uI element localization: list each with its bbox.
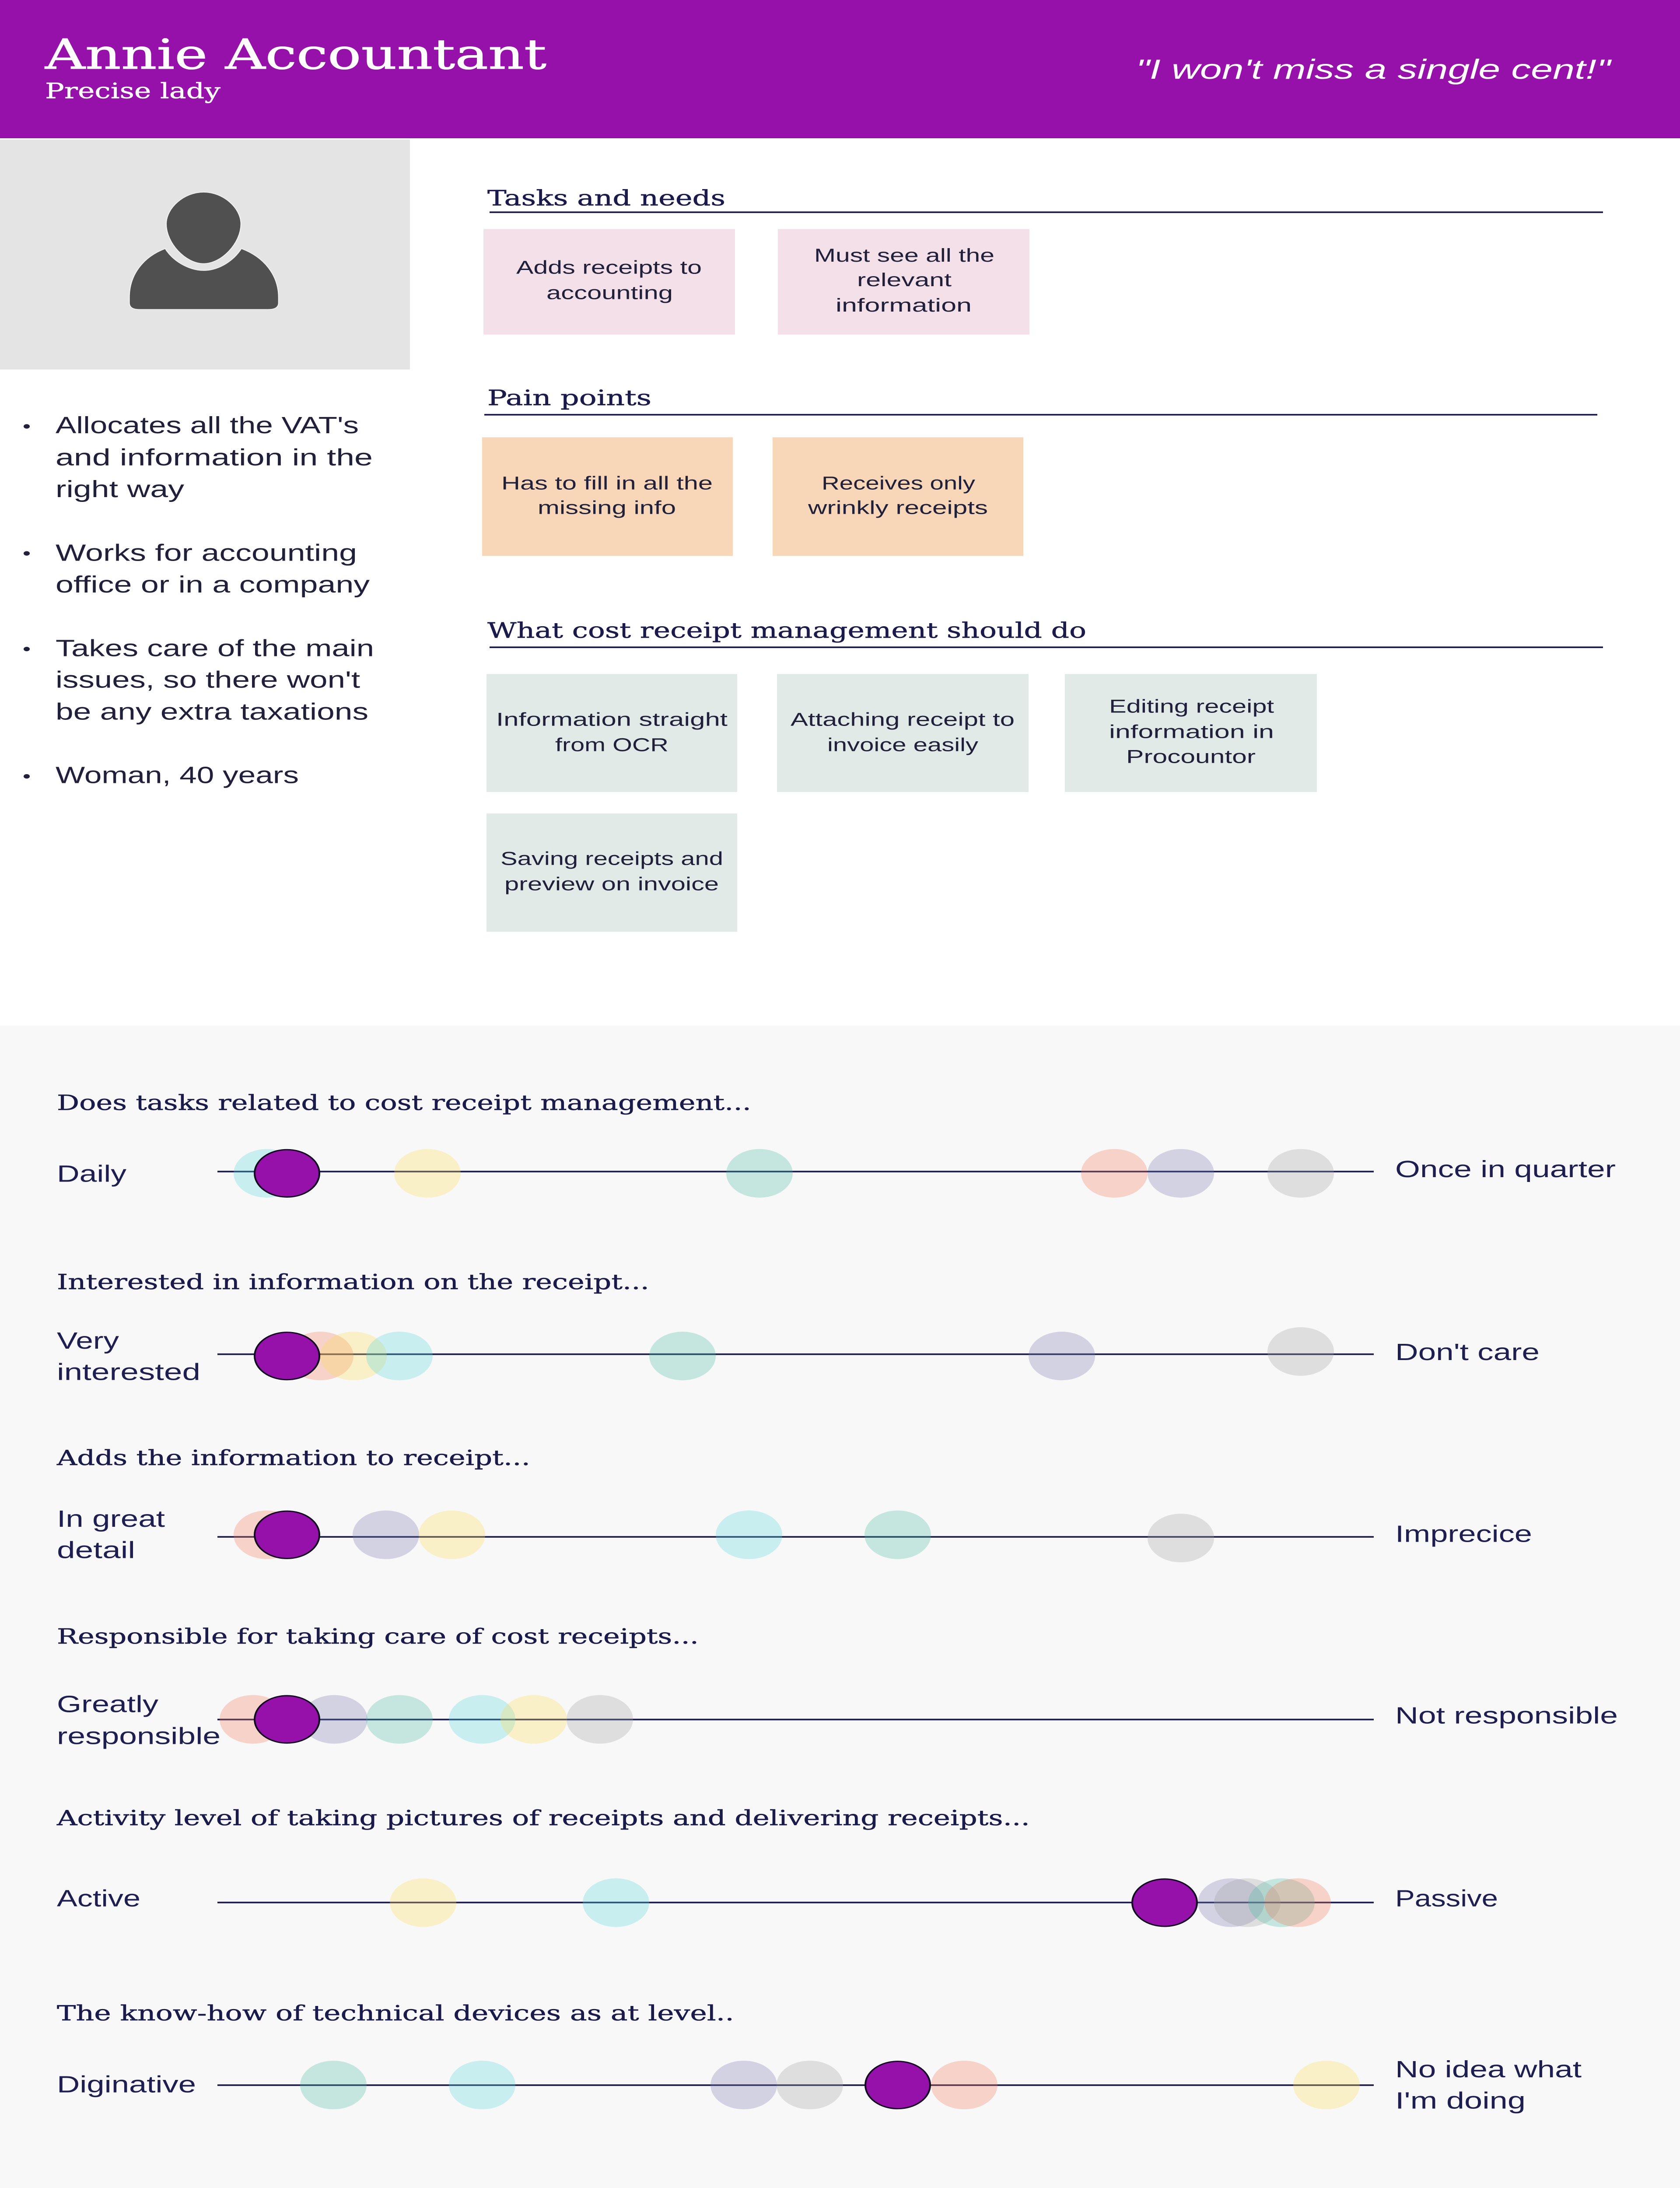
heading: what it should do [487, 618, 1603, 648]
left label: Active [57, 1885, 140, 1911]
card: information from OCR: Information straight [496, 709, 728, 730]
persona marker [255, 1332, 319, 1380]
right label: No idea what [1395, 2056, 1582, 2083]
bullet 2: Works for accounting [56, 539, 357, 566]
title: Annie Accountant [45, 30, 546, 79]
bullet 1: and information in the [56, 444, 373, 470]
comparison dots [220, 1695, 633, 1744]
portrait panel [0, 140, 410, 369]
quote: "I won't miss a single cent!" [1136, 54, 1612, 84]
card: wrinkly receipts: Receives only [822, 473, 976, 494]
left label: Daily [57, 1160, 127, 1187]
card: editing receipt [1065, 674, 1317, 792]
scale: activity [56, 1806, 1498, 1927]
bullet list: description [24, 412, 374, 788]
comparison dots [234, 1511, 1214, 1562]
question: Responsible for taking care of cost receipts... [57, 1624, 699, 1649]
right label: Not responsible [1395, 1702, 1618, 1729]
bullet 3: be any extra taxations [56, 698, 368, 725]
left label: In great [57, 1505, 165, 1532]
comparison dots [234, 1149, 1334, 1198]
scale: frequency [57, 1091, 1616, 1198]
question: Interested in information on the receipt... [57, 1270, 649, 1294]
bullet 3 [24, 635, 374, 725]
card: must see information [778, 229, 1029, 335]
card: saving receipts: Saving receipts and [500, 848, 723, 869]
left label [57, 1327, 200, 1385]
bullet 2: office or in a company [56, 571, 370, 597]
card: must see information: Must see all the [814, 245, 994, 266]
heading: what it should do: What cost receipt management should do [487, 618, 1086, 643]
persona marker [255, 1696, 319, 1743]
right label: I'm doing [1395, 2087, 1526, 2114]
heading: tasks and needs [487, 186, 1603, 213]
card: information from OCR [486, 674, 737, 792]
left label: interested [57, 1358, 200, 1385]
card: saving receipts [486, 813, 737, 932]
bullet 1: right way [56, 476, 185, 502]
panel: what cost receipt management should do [486, 618, 1603, 932]
right label: Imprecice [1395, 1520, 1532, 1547]
card: editing receipt: Procountor [1126, 746, 1256, 767]
scale: precision [56, 1446, 1532, 1563]
card: missing info [482, 437, 733, 556]
question: Activity level of taking pictures of receipts and delivering receipts... [56, 1806, 1030, 1830]
question: Does tasks related to cost receipt management... [57, 1091, 751, 1115]
left label: detail [57, 1536, 135, 1563]
comparison dots [287, 1327, 1334, 1380]
card: information from OCR: from OCR [555, 734, 668, 755]
bullet 1: Allocates all the VAT's [56, 412, 359, 438]
card: attaching receipt [777, 674, 1029, 792]
scale: responsibility [57, 1624, 1618, 1749]
card: must see information: relevant [857, 270, 952, 290]
scale line [217, 2084, 1374, 2086]
bullet 3: Takes care of the main [56, 635, 374, 661]
right label: Don't care [1395, 1339, 1540, 1365]
left label: Diginative [57, 2071, 196, 2097]
card: wrinkly receipts [773, 437, 1023, 556]
scale line [217, 1719, 1374, 1720]
right label: Once in quarter [1395, 1156, 1616, 1182]
panel: pain points [482, 386, 1597, 556]
card: adds receipts: accounting [546, 282, 673, 303]
card: adds receipts: Adds receipts to [516, 257, 702, 278]
left label [57, 1690, 220, 1749]
bullet 2 [24, 539, 370, 597]
scale line [217, 1171, 1374, 1172]
card: attaching receipt: Attaching receipt to [791, 709, 1015, 730]
heading: tasks and needs: Tasks and needs [487, 186, 725, 210]
icon: person silhouette [130, 192, 279, 309]
card: saving receipts: preview on invoice [504, 873, 719, 894]
comparison dots [300, 2061, 1360, 2109]
scale: interest [57, 1270, 1540, 1385]
heading: pain points: Pain points [487, 386, 651, 410]
panel: behaviour scales [0, 1026, 1680, 2188]
scale: technical know-how [57, 2002, 1582, 2114]
question: Adds the information to receipt... [56, 1446, 530, 1470]
scale line [217, 1536, 1374, 1538]
persona marker [865, 2062, 930, 2109]
bullet 3: issues, so there won't [56, 666, 360, 693]
comparison dots [390, 1878, 1331, 1927]
right label: Passive [1395, 1885, 1498, 1911]
scale line [217, 1902, 1374, 1903]
card: adds receipts [483, 229, 735, 335]
scale line [217, 1353, 1374, 1355]
heading: pain points [484, 386, 1597, 416]
card: wrinkly receipts: wrinkly receipts [808, 497, 988, 518]
left label [57, 1505, 165, 1563]
right label [1395, 2056, 1582, 2114]
card: missing info: missing info [538, 497, 676, 518]
card: attaching receipt: invoice easily [827, 734, 979, 755]
bullet 4: Woman, 40 years [56, 761, 299, 788]
panel: tasks and needs [483, 186, 1603, 335]
subtitle: Precise lady [45, 78, 220, 103]
persona marker [1132, 1879, 1197, 1926]
question: The know-how of technical devices as at level.. [57, 2002, 734, 2026]
bullet 1 [24, 412, 373, 502]
header banner [0, 0, 1680, 138]
card: editing receipt: information in [1109, 721, 1274, 742]
persona marker [255, 1511, 319, 1558]
card: editing receipt: Editing receipt [1109, 696, 1274, 717]
left label: Very [57, 1327, 119, 1354]
persona marker [255, 1150, 319, 1197]
card: must see information: information [836, 295, 972, 316]
left label: responsible [57, 1722, 220, 1749]
left label: Greatly [57, 1690, 159, 1717]
card: missing info: Has to fill in all the [501, 473, 713, 494]
